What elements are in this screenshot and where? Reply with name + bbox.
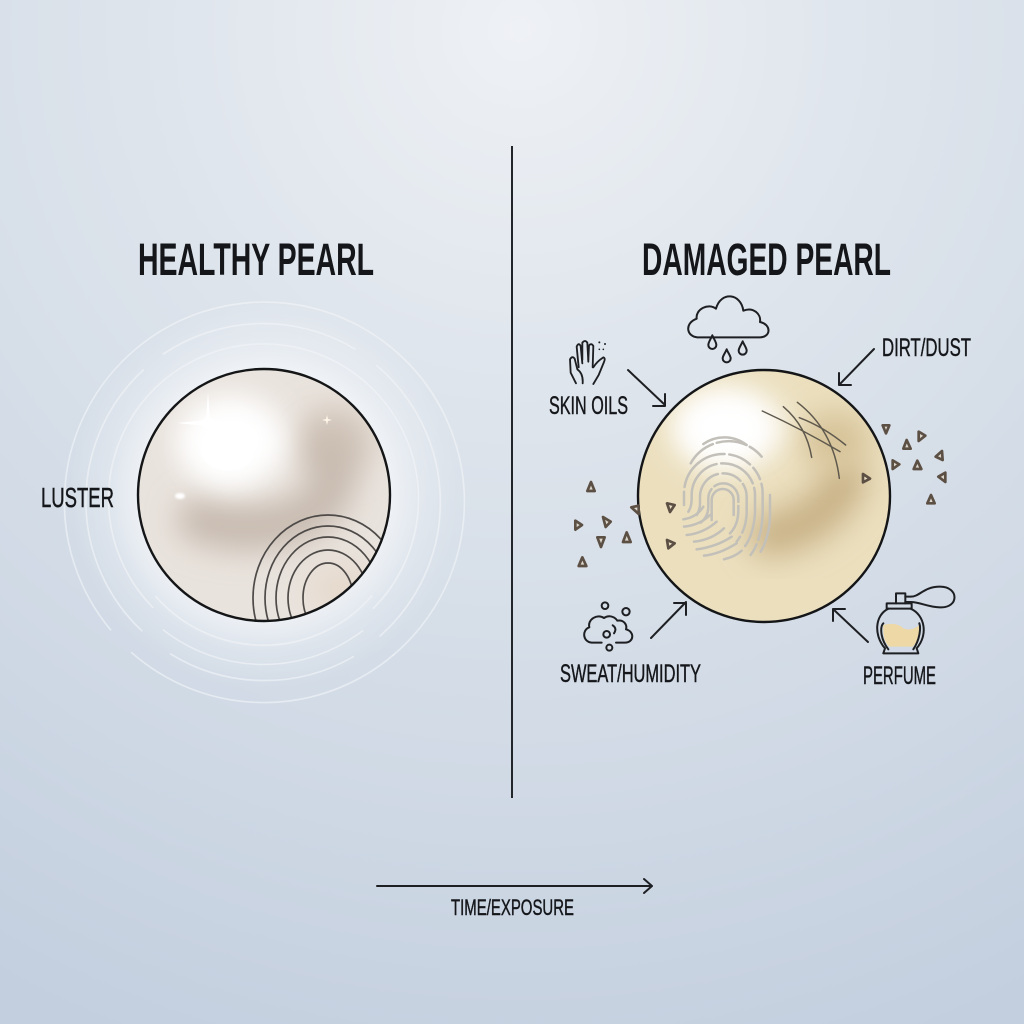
panel: damaged pearl bbox=[549, 296, 971, 690]
icon: rain cloud bbox=[688, 296, 769, 362]
arrow: time and exposure bbox=[377, 879, 652, 893]
arrow: sweat and humidity bbox=[651, 602, 686, 638]
center divider bbox=[511, 146, 513, 798]
dust particles bbox=[575, 425, 945, 566]
heading: healthy pearl: HEALTHY PEARL bbox=[138, 234, 374, 285]
scratches bbox=[762, 402, 846, 478]
icon: hand with oil droplets bbox=[570, 341, 606, 384]
sparkles bbox=[175, 392, 332, 499]
label: dirt and dust: DIRT/DUST bbox=[882, 334, 971, 362]
label: perfume: PERFUME bbox=[863, 662, 936, 690]
label: time and exposure: TIME/EXPOSURE bbox=[451, 895, 574, 920]
growth rings on nacre bbox=[252, 514, 381, 620]
healthy pearl sphere bbox=[136, 368, 392, 622]
arrow: skin oils bbox=[628, 370, 665, 406]
damaged pearl sphere bbox=[638, 370, 890, 622]
label: luster: LUSTER bbox=[41, 482, 114, 513]
panel: healthy pearl bbox=[41, 301, 464, 703]
glow behind healthy pearl bbox=[69, 301, 459, 691]
luster rings bbox=[64, 302, 464, 703]
arrow: dirt and dust bbox=[839, 349, 874, 385]
icon: sweat cloud with bubbles bbox=[584, 602, 632, 651]
icon: perfume bottle bbox=[877, 587, 954, 653]
label: skin oils: SKIN OILS bbox=[549, 392, 628, 420]
label: sweat and humidity: SWEAT/HUMIDITY bbox=[560, 660, 701, 688]
fingerprint bbox=[683, 437, 770, 559]
arrow: perfume bbox=[833, 609, 868, 642]
